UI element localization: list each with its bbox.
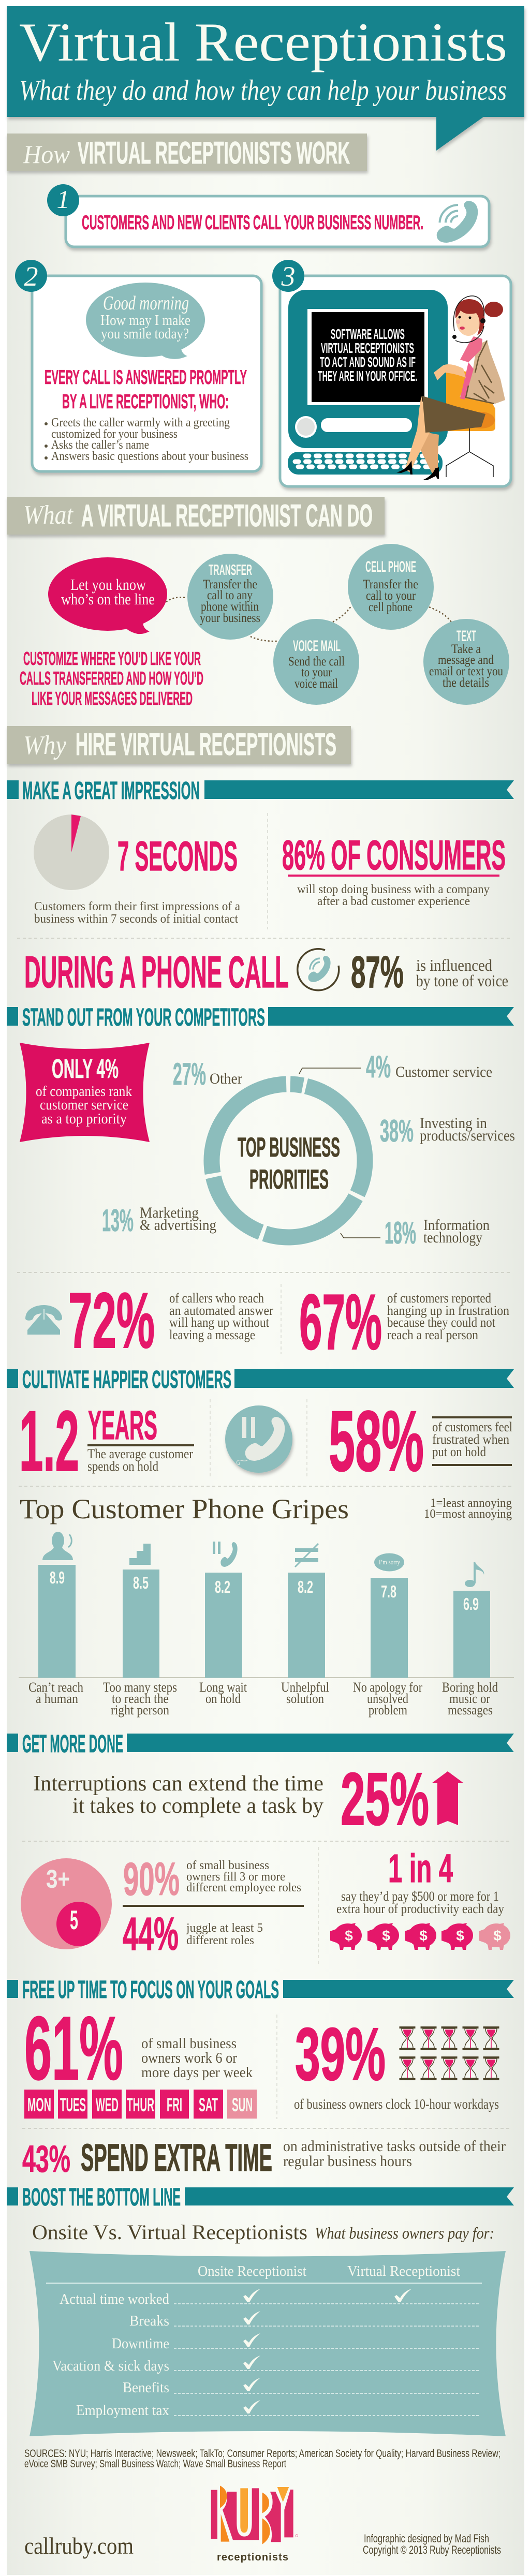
step 3 badge [272, 260, 304, 292]
stat: 86% of consumers: will stop doing business with a company [297, 883, 490, 896]
option: voice mail: Send the call [288, 655, 345, 669]
bar: no apology [353, 1553, 422, 1718]
label: 27% other: 27% [173, 1057, 206, 1091]
option: transfer: TRANSFER [209, 562, 252, 579]
stat: 72%: of callers who reach [169, 1291, 264, 1306]
table header: Virtual Receptionist [347, 2263, 460, 2279]
bullet list: customized for your business [51, 427, 178, 441]
label: 27% other: Other [210, 1070, 242, 1087]
label: 13% marketing: 13% [102, 1203, 134, 1238]
bar: boring hold music: Boring hold [442, 1680, 498, 1695]
option: voice mail [273, 619, 359, 705]
bar: boring hold music: 6.9 [463, 1594, 479, 1613]
customize callout [20, 648, 203, 709]
stat: 67%: because they could not [387, 1315, 496, 1330]
stat: 1.2 years: spends on hold [87, 1459, 158, 1474]
label: 4% customer service [299, 1049, 492, 1084]
option: transfer [187, 554, 273, 640]
icon: old telephone [25, 1305, 62, 1335]
connector dots [166, 597, 451, 641]
stat: 44% [123, 1908, 263, 1960]
row labels: Benefits [123, 2379, 169, 2396]
weekday boxes: TUES [60, 2094, 86, 2115]
label: 38% investing: products/services [420, 1127, 515, 1144]
stat: 7 seconds [34, 833, 240, 926]
callout: only 4%: ONLY 4% [52, 1054, 119, 1084]
nested circles: 3+ and 5 roles [21, 1858, 112, 1949]
banner: stand out from your competitors: STAND OUT FROM YOUR COMPETITORS [22, 1004, 265, 1031]
icon: phone in ring [298, 949, 339, 990]
table header: Onsite Receptionist [198, 2263, 306, 2279]
stat: 90%: of small business [186, 1859, 269, 1872]
bar: can't reach a human: a human [36, 1691, 78, 1706]
computer illustration: TO ACT AND SOUND AS IF [320, 354, 416, 370]
callout: only 4%: customer service [40, 1097, 128, 1113]
piggy banks: 4 of 5: $ [493, 1928, 502, 1944]
label: 38% investing: 38% [380, 1114, 414, 1148]
step 2 headline: EVERY CALL IS ANSWERED PROMPTLY [45, 366, 247, 389]
bar: boring hold music [442, 1562, 498, 1718]
option: voice mail: VOICE MAIL [293, 638, 341, 655]
option: text: message and [438, 653, 494, 667]
banner: boost the bottom line [7, 2184, 514, 2211]
option: transfer: call to any [207, 588, 253, 602]
stat: 90%: different employee roles [186, 1881, 301, 1894]
bar: can't reach a human: 8.9 [50, 1568, 65, 1587]
stat: 43% spend extra time: regular business hours [283, 2153, 412, 2170]
bar: unhelpful solution: 8.2 [298, 1577, 313, 1596]
piggy banks: 4 of 5: $ [345, 1928, 353, 1944]
stat: 43% spend extra time: 43% [22, 2138, 70, 2180]
option: voice mail: voice mail [295, 677, 338, 691]
step 1 badge [47, 184, 79, 216]
row labels: Breaks [129, 2313, 169, 2329]
stat: 1.2 years [19, 1394, 194, 1489]
bullet list: Asks the caller’s name [51, 438, 149, 452]
credits: Infographic designed by Mad Fish [364, 2532, 489, 2545]
stat: 86% of consumers [282, 832, 506, 908]
option: transfer: Transfer the [203, 578, 257, 591]
bar: can't reach a human: Can’t reach [28, 1680, 83, 1695]
sources [24, 2448, 500, 2470]
step 1 panel [47, 184, 489, 247]
option: text: the details [443, 676, 489, 690]
row labels: Employment tax [76, 2402, 169, 2419]
bar: long wait on hold: on hold [205, 1691, 241, 1706]
weekday boxes: THUR [127, 2094, 154, 2115]
option: text [423, 619, 509, 705]
bar: too many steps: Too many steps [103, 1680, 177, 1695]
bar: long wait on hold: 8.2 [215, 1577, 230, 1596]
bar chart: phone gripes [19, 1532, 514, 1718]
label: 13% marketing: Marketing [140, 1204, 199, 1221]
speech bubble: let you know [48, 557, 167, 634]
bullet list: Greets the caller warmly with a greeting [51, 416, 230, 430]
banner: get more done: GET MORE DONE [22, 1730, 123, 1758]
stat: 44%: juggle at least 5 [186, 1921, 263, 1935]
stat: 67%: 67% [299, 1278, 382, 1366]
step 3 badge: 3 [281, 261, 295, 292]
hourglasses [400, 2026, 499, 2080]
weekday boxes: MON [27, 2094, 51, 2115]
chart scale note: 10=most annoying [424, 1507, 512, 1521]
speech bubble: let you know: Let you know [70, 575, 146, 594]
speech bubble [86, 283, 205, 359]
logo: ruby receptionists: receptionists [217, 2552, 288, 2563]
statement: interruptions [33, 1772, 323, 1818]
callout: only 4%: of companies rank [36, 1084, 132, 1100]
stat: 72%: 72% [68, 1277, 155, 1365]
donut chart: top business priorities: TOP BUSINESS [238, 1132, 340, 1163]
computer illustration: VIRTUAL RECEPTIONISTS [321, 340, 414, 356]
stat: 43% spend extra time: SPEND EXTRA TIME [81, 2136, 272, 2179]
sources: eVoice SMB Survey; Small Business Watch; Wave Small Business Report [24, 2458, 286, 2470]
bar: no apology: unsolved [367, 1691, 408, 1706]
step 2 panel [15, 260, 261, 471]
title banner [7, 6, 524, 151]
label: 18% information technology: technology [423, 1229, 482, 1246]
bullet list [45, 416, 248, 463]
table title: Onsite Vs. Virtual Receptionists [32, 2220, 307, 2244]
speech bubble: you smile today? [101, 326, 189, 342]
stat: 72%: will hang up without [169, 1315, 270, 1330]
stat: 1 in 4: 1 in 4 [388, 1846, 453, 1891]
bar: boring hold music: messages [448, 1702, 493, 1718]
callout: only 4% [20, 1043, 150, 1142]
pie chart: 7 seconds [34, 815, 109, 890]
bar: no apology: problem [369, 1702, 407, 1718]
callout: only 4%: as a top priority [41, 1111, 127, 1127]
donut chart: top business priorities: PRIORITIES [249, 1164, 329, 1195]
option: transfer: phone within [201, 600, 259, 614]
customize callout: LIKE YOUR MESSAGES DELIVERED [32, 688, 193, 709]
stat: 7 seconds: Customers form their first impressions of a [34, 900, 240, 913]
banner: cultivate happier customers: CULTIVATE HAPPIER CUSTOMERS [22, 1366, 231, 1394]
banner: get more done [7, 1730, 514, 1758]
speech bubble: Good morning [103, 292, 189, 314]
stat: 1 in 4: say they’d pay $500 or more for 1 [341, 1889, 499, 1904]
bar: too many steps: to reach the [112, 1691, 169, 1706]
row labels: Vacation & sick days [52, 2358, 169, 2374]
stat: 1.2 years: The average customer [87, 1446, 193, 1461]
speech bubble: How may I make [100, 313, 190, 329]
stat: 61%: owners work 6 or [141, 2050, 237, 2066]
label: 4% customer service: Customer service [395, 1063, 492, 1080]
url: callruby.com [24, 2533, 134, 2559]
heading: why hire virtual receptionists: Why [23, 731, 67, 760]
step 2 headline: BY A LIVE RECEPTIONIST, WHO: [62, 391, 229, 413]
table title [32, 2220, 494, 2244]
label: 18% information technology [341, 1216, 490, 1250]
option: voice mail: to your [301, 665, 332, 679]
stat: 44%: 44% [123, 1908, 179, 1960]
label: 18% information technology: Information [423, 1217, 490, 1234]
row labels [52, 2291, 169, 2419]
weekday boxes [24, 2090, 257, 2119]
weekday boxes: FRI [167, 2094, 182, 2115]
option: text: Take a [451, 642, 481, 656]
icon: phone on hold [225, 1405, 292, 1473]
stat: 1.2 years: YEARS [88, 1402, 157, 1448]
stat: during a phone call: DURING A PHONE CALL [24, 948, 289, 997]
nested circles: 3+ and 5 roles: 5 [70, 1905, 78, 1935]
stat: 1 in 4: extra hour of productivity each day [336, 1901, 504, 1916]
stat: 90%: owners fill 3 or more [186, 1870, 285, 1884]
credits [363, 2532, 501, 2556]
nested circles: 3+ and 5 roles: 3+ [46, 1864, 70, 1893]
stat: 39%: 39% [295, 2012, 386, 2096]
piggy banks: 4 of 5: $ [382, 1928, 390, 1944]
arrow up [432, 1771, 464, 1825]
stat: 7 seconds: business within 7 seconds of initial contact [34, 912, 238, 926]
option: transfer: your business [200, 611, 260, 625]
table header [198, 2263, 460, 2279]
comparison table [30, 2251, 506, 2436]
bar: no apology: I’m sorry [379, 1558, 400, 1566]
bar: unhelpful solution: solution [286, 1691, 324, 1706]
bar: no apology: No apology for [353, 1680, 422, 1695]
stat: 25%: 25% [341, 1757, 429, 1841]
heading: what a virtual receptionist can do [7, 497, 385, 535]
banner: make a great impression [7, 777, 514, 805]
stat: 72%: leaving a message [169, 1327, 255, 1342]
option: text: TEXT [457, 628, 476, 645]
stat: 61%: more days per week [141, 2064, 253, 2081]
bar: too many steps: right person [111, 1702, 169, 1718]
bar: unhelpful solution: Unhelpful [281, 1680, 329, 1695]
option: cell phone: cell phone [369, 600, 413, 614]
speech bubble: let you know: who’s on the line [61, 590, 155, 608]
logo: ruby receptionists [211, 2485, 298, 2563]
bar: long wait on hold: Long wait [199, 1680, 247, 1695]
stat: 90%: 90% [123, 1854, 180, 1905]
stat: 67%: hanging up in frustration [387, 1303, 509, 1318]
computer illustration: SOFTWARE ALLOWS [331, 326, 405, 342]
stat: 39% [294, 2012, 499, 2112]
stat: during a phone call: by tone of voice [416, 971, 508, 990]
bar: no apology: 7.8 [381, 1582, 396, 1601]
heading: how virtual receptionists work [7, 134, 367, 171]
option: cell phone: Transfer the [363, 578, 418, 591]
stat: 1.2 years: 1.2 [19, 1394, 79, 1489]
stat: during a phone call: is influenced [416, 956, 492, 974]
stat: 58%: 58% [329, 1394, 424, 1489]
bar: long wait on hold [199, 1542, 247, 1706]
piggy banks: 4 of 5: $ [456, 1928, 464, 1944]
stat: 67%: reach a real person [387, 1327, 478, 1342]
bar: too many steps [103, 1544, 177, 1718]
stat: 61%: of small business [141, 2035, 237, 2052]
label: 38% investing: Investing in [420, 1115, 487, 1132]
stat: 1 in 4 [336, 1846, 504, 1916]
chart scale note: 1=least annoying [430, 1497, 512, 1510]
stat: during a phone call: 87% [351, 948, 404, 997]
heading: why hire virtual receptionists [7, 726, 351, 764]
label: 38% investing [380, 1114, 515, 1148]
step 2 headline [45, 366, 247, 413]
option: cell phone: call to your [366, 589, 416, 603]
heading: what a virtual receptionist can do: What [23, 500, 73, 530]
bar: boring hold music: music or [449, 1691, 490, 1706]
computer illustration: THEY ARE IN YOUR OFFICE. [318, 368, 417, 384]
option: text: email or text you [429, 664, 503, 678]
bar: can't reach a human [28, 1532, 83, 1706]
statement: interruptions: it takes to complete a task by [72, 1794, 323, 1818]
weekday boxes: WED [96, 2094, 119, 2115]
stat: 58%: put on hold [432, 1444, 486, 1459]
heading: how virtual receptionists work: How [23, 140, 70, 169]
label: 13% marketing: & advertising [140, 1217, 216, 1234]
stat: 72%: an automated answer [169, 1303, 273, 1318]
check marks [243, 2289, 411, 2414]
stat: 90% [123, 1854, 301, 1905]
stat: 58%: frustrated when [432, 1432, 509, 1447]
step 1 badge: 1 [57, 185, 69, 214]
stat: 43% spend extra time: on administrative tasks outside of their [283, 2138, 506, 2155]
title: Virtual Receptionists [19, 12, 507, 72]
banner: boost the bottom line: BOOST THE BOTTOM LINE [22, 2184, 181, 2211]
customize callout: CUSTOMIZE WHERE YOU’D LIKE YOUR [23, 648, 201, 669]
step 3 panel [272, 260, 511, 486]
piggy banks: 4 of 5 [330, 1923, 510, 1950]
bar: too many steps: 8.5 [133, 1573, 149, 1592]
banner: make a great impression: MAKE A GREAT IMPRESSION [22, 777, 200, 805]
piggy banks: 4 of 5: $ [419, 1928, 428, 1944]
option: cell phone [348, 544, 434, 630]
table title: What business owners pay for: [315, 2224, 494, 2242]
chart scale note [424, 1497, 512, 1521]
label: 4% customer service: 4% [366, 1049, 391, 1084]
row labels: Actual time worked [60, 2291, 169, 2307]
receptionist illustration [396, 296, 505, 480]
weekday boxes: SUN [232, 2094, 253, 2115]
step 2 badge: 2 [24, 261, 38, 292]
chart title: top customer phone gripes: Top Customer Phone Gripes [20, 1493, 349, 1524]
stat: 61%: 61% [24, 1997, 123, 2098]
stat: 86% of consumers: after a bad customer experience [317, 895, 470, 908]
label: 18% information technology: 18% [385, 1216, 416, 1250]
label: 13% marketing [102, 1203, 216, 1238]
donut chart: top business priorities [212, 1084, 365, 1237]
computer illustration [288, 290, 448, 475]
step 2 badge [15, 260, 47, 292]
icon: ringing phone [437, 201, 478, 243]
stat: 58%: of customers feel [432, 1419, 512, 1434]
option: cell phone: CELL PHONE [365, 558, 416, 575]
bullet list: Answers basic questions about your business [51, 450, 248, 463]
statement: interruptions: Interruptions can extend the time [33, 1772, 323, 1796]
stat: 7 seconds: 7 SECONDS [117, 833, 238, 880]
weekday boxes: SAT [199, 2094, 218, 2115]
customize callout: CALLS TRANSFERRED AND HOW YOU’D [20, 668, 203, 689]
stat: 44%: different roles [186, 1934, 254, 1947]
row labels: Downtime [112, 2335, 169, 2352]
stat: 67%: of customers reported [387, 1291, 491, 1306]
bar: unhelpful solution [281, 1544, 329, 1706]
